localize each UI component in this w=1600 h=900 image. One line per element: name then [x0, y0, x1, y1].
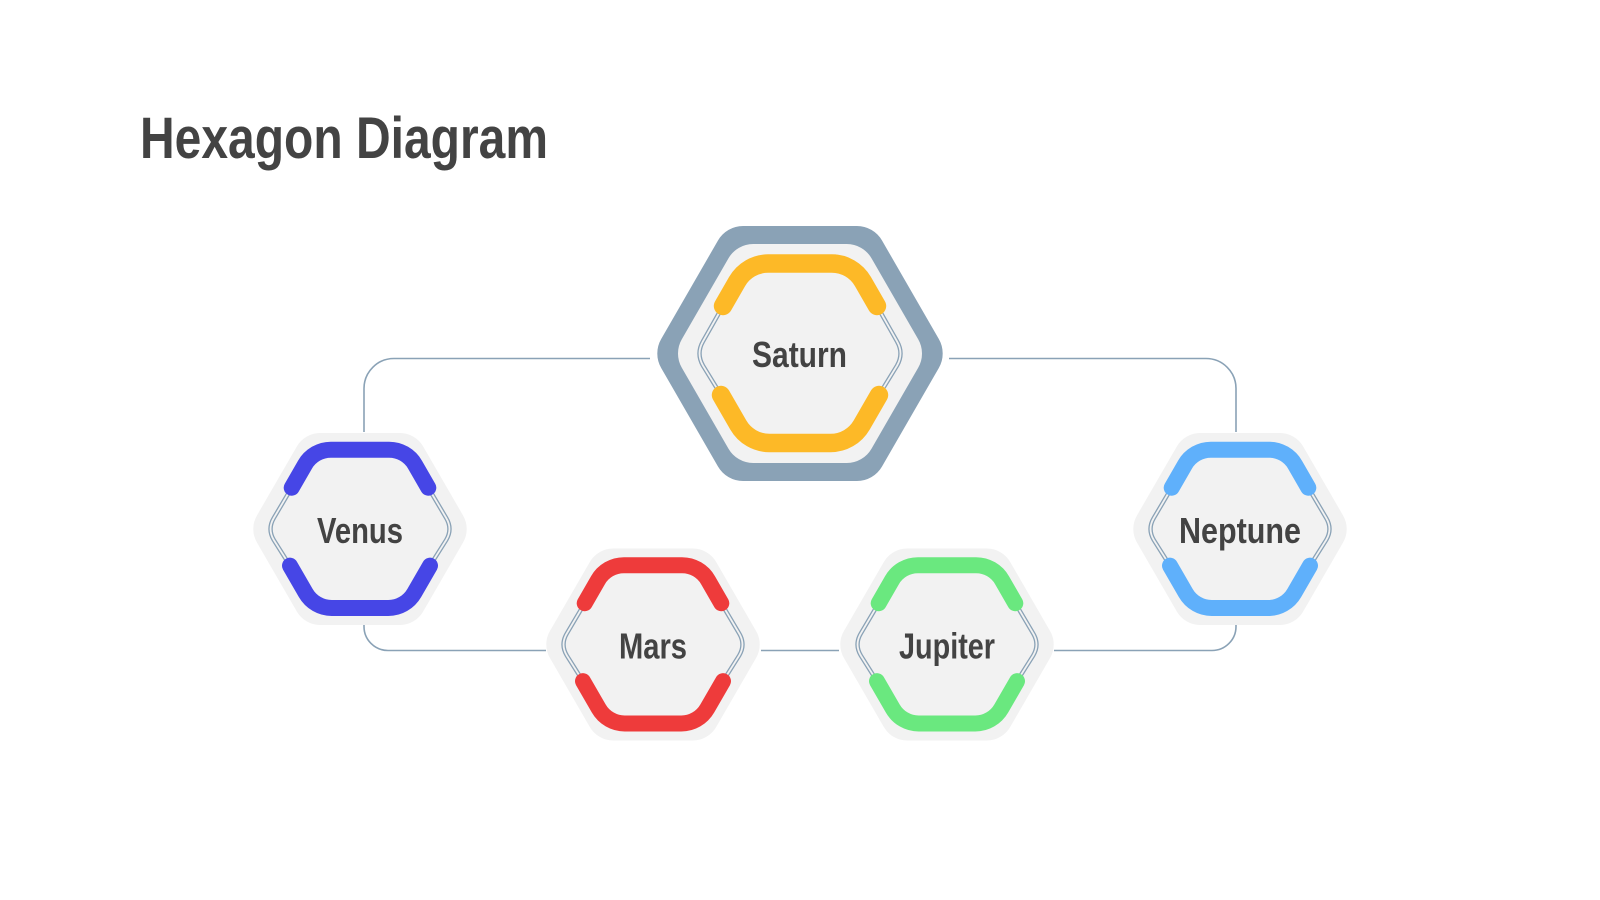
- connector lines: [364, 358, 1236, 650]
- top arc: [879, 565, 1015, 603]
- label: Neptune: [1179, 510, 1301, 551]
- double side lines: [700, 306, 900, 395]
- bottom arc: [721, 395, 879, 443]
- node: Venus: [271, 450, 449, 608]
- top arc: [292, 450, 428, 488]
- label: Saturn: [752, 334, 847, 375]
- inner hexagon: [706, 272, 894, 434]
- node: Saturn: [686, 255, 914, 452]
- node: Jupiter: [858, 565, 1036, 724]
- hexagon background: [867, 576, 1027, 714]
- double side lines: [1151, 488, 1329, 566]
- bottom arc: [1170, 566, 1310, 608]
- node: Mars: [564, 565, 742, 724]
- bottom arc: [290, 566, 430, 608]
- outer hexagon frame: [686, 255, 914, 452]
- label: Jupiter: [899, 626, 995, 666]
- hexagon background: [280, 460, 440, 598]
- label: Venus: [317, 510, 403, 551]
- bottom arc: [877, 681, 1017, 724]
- hexagon background: [573, 576, 733, 714]
- top arc: [723, 264, 877, 306]
- title: Hexagon Diagram: [140, 106, 548, 171]
- node: Neptune: [1151, 450, 1329, 608]
- label: Mars: [619, 626, 687, 666]
- double side lines: [271, 488, 449, 566]
- top arc: [1172, 450, 1308, 488]
- double side lines: [564, 603, 742, 681]
- hexagon background: [1160, 460, 1320, 598]
- top arc: [585, 565, 721, 603]
- bottom arc: [583, 681, 723, 724]
- double side lines: [858, 603, 1036, 681]
